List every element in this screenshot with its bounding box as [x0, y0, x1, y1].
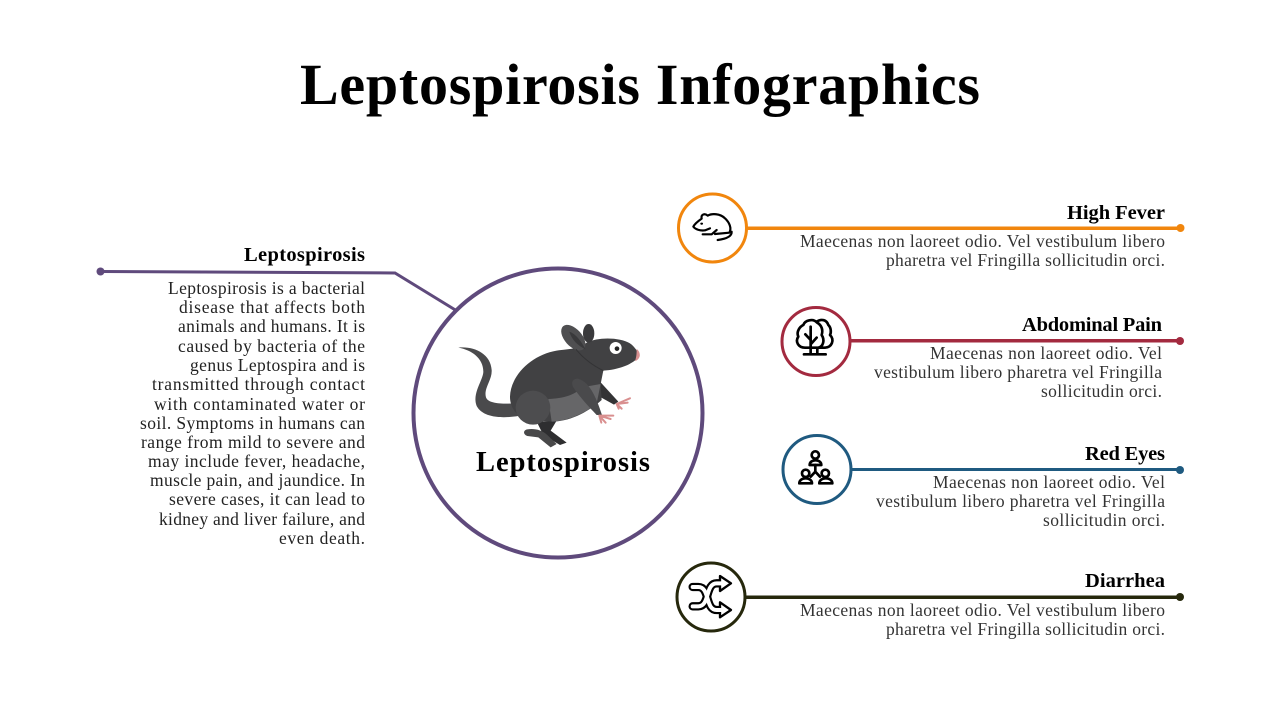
heading: High Fever	[1067, 202, 1165, 224]
panel: Diarrhea	[677, 563, 1184, 639]
text block: description: may include fever, headache,	[148, 451, 365, 471]
panel: Red Eyes	[783, 436, 1184, 530]
icon: mouse in circle	[678, 194, 746, 262]
text block: vestibulum libero pharetra vel Fringilla	[876, 491, 1165, 511]
icon: people network in circle	[783, 436, 851, 504]
icon: trees in circle	[782, 308, 850, 376]
text block: description: severe cases, it can lead to	[169, 489, 365, 509]
panel: central circle	[414, 268, 702, 558]
text block: description: Leptospirosis is a bacterial	[168, 278, 365, 298]
text block	[800, 600, 1165, 639]
connector line	[851, 337, 1184, 345]
text block: description: muscle pain, and jaundice. In	[150, 470, 365, 490]
text block: pharetra vel Fringilla sollicitudin orci.	[886, 619, 1165, 639]
text block: Maecenas non laoreet odio. Vel vestibulum libero	[800, 231, 1165, 251]
text block: Maecenas non laoreet odio. Vel	[933, 472, 1165, 492]
text block	[876, 472, 1165, 530]
text block	[800, 231, 1165, 270]
connector line: purple	[96, 268, 457, 311]
icon: rat	[458, 320, 640, 447]
text block: description: disease that affects both	[179, 297, 365, 317]
connector line	[852, 466, 1184, 474]
text block: sollicitudin orci.	[1043, 510, 1165, 530]
text block: description: kidney and liver failure, and	[159, 509, 365, 529]
connector line	[745, 593, 1184, 601]
text block: description	[140, 278, 365, 548]
ring	[414, 268, 702, 558]
text block: description: soil. Symptoms in humans can	[140, 413, 365, 433]
icon: shuffle arrows in circle	[677, 563, 745, 631]
text block	[874, 343, 1162, 401]
title: Leptospirosis Infographics	[300, 52, 980, 117]
text block: Maecenas non laoreet odio. Vel	[930, 343, 1162, 363]
text block: description: caused by bacteria of the	[178, 336, 365, 356]
text block: description: even death.	[279, 528, 365, 548]
panel: High Fever	[678, 194, 1184, 270]
heading: Abdominal Pain	[1022, 314, 1163, 336]
text block: description: animals and humans. It is	[178, 316, 365, 336]
label: Leptospirosis: Leptospirosis	[476, 447, 650, 478]
text block: description: range from mild to severe and	[141, 432, 365, 452]
connector line	[747, 224, 1184, 232]
panel: Abdominal Pain	[782, 308, 1184, 401]
heading: Diarrhea	[1085, 570, 1165, 592]
text block: pharetra vel Fringilla sollicitudin orci.	[886, 250, 1165, 270]
text block: description: transmitted through contact	[152, 374, 365, 394]
text block: description: genus Leptospira and is	[190, 355, 365, 375]
text block: Maecenas non laoreet odio. Vel vestibulum libero	[800, 600, 1165, 620]
text block: description: with contaminated water or	[154, 394, 365, 414]
heading: Leptospirosis: Leptospirosis	[244, 244, 365, 266]
heading: Red Eyes	[1085, 443, 1165, 465]
panel: left description	[96, 244, 457, 548]
text block: sollicitudin orci.	[1041, 381, 1162, 401]
text block: vestibulum libero pharetra vel Fringilla	[874, 362, 1162, 382]
